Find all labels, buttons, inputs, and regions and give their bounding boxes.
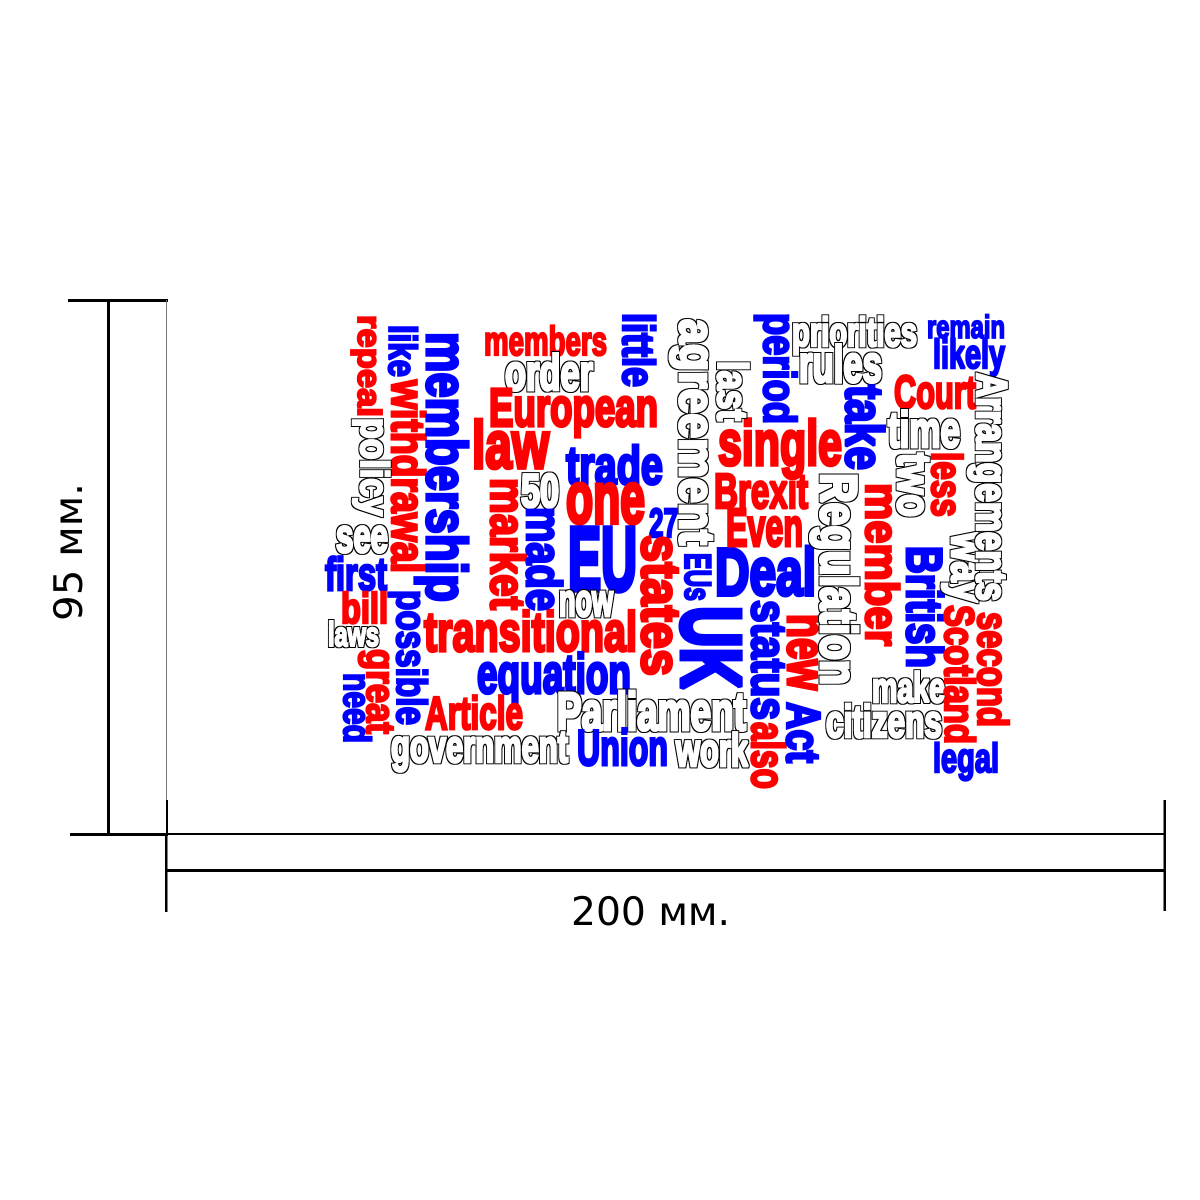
word: priorities: priorities [792,309,917,355]
word: remain: remain [927,309,1005,345]
word: withdrawal: withdrawal [382,379,434,573]
height dimension bracket [68,299,168,836]
word: little: little [613,313,662,387]
word: order: order [505,344,593,401]
word: members: members [484,318,607,364]
word: UK: UK [664,606,758,689]
width dimension bracket [165,800,1166,912]
word: first: first [325,548,387,600]
word: equation: equation [477,642,631,705]
word: repeal: repeal [350,315,387,417]
word: agreement: agreement [669,319,724,545]
word: see: see [336,509,388,562]
word: laws: laws [328,616,379,654]
word: market: market [480,478,534,610]
word: way: way [941,532,994,603]
word: time: time [888,401,960,458]
word: Scotland: Scotland [936,605,983,744]
word: likely: likely [933,331,1005,377]
word: like: like [380,325,423,377]
word: need: need [335,673,377,743]
word: British: British [896,546,952,668]
word: government: government [391,721,568,772]
word: Union: Union [577,719,668,776]
word: make: make [872,664,945,711]
word: European: European [489,378,658,438]
word: period: period [754,313,805,424]
word: Arrangements: Arrangements [967,373,1015,601]
word: policy: policy [352,418,395,516]
word: now: now [559,575,614,626]
word: great: great [358,649,402,734]
word: possible: possible [388,590,435,725]
word: Brexit: Brexit [714,464,808,519]
word: transitional: transitional [424,601,637,663]
word: second: second [968,612,1016,727]
word: legal: legal [933,735,999,781]
word: Even: Even [726,499,803,558]
word: take: take [834,385,893,470]
word: Regulation: Regulation [810,473,867,685]
word: citizens: citizens [826,696,942,747]
label: width 200 mm: 200 мм. [571,890,730,935]
word cloud [325,309,1016,789]
word: 27: 27 [649,500,678,546]
word: EU: EU [568,510,637,610]
word: law: law [472,408,549,483]
word: trade: trade [566,437,663,496]
word: member: member [856,483,908,646]
word: bill: bill [341,585,388,633]
word: work: work [675,724,748,776]
word: states: states [630,535,691,676]
word: Article: Article [425,687,523,739]
word: new: new [776,614,836,691]
word: single: single [718,409,842,479]
word: Act: Act [777,702,830,763]
word: 50: 50 [521,464,559,517]
word: membership: membership [414,332,477,602]
label: height 95 mm: 95 мм. [47,483,92,621]
word: Parliament: Parliament [557,683,746,742]
word: less: less [922,452,970,517]
word: one: one [566,459,645,539]
word: EUs: EUs [677,553,718,601]
word: Deal: Deal [715,535,816,610]
word: last: last [709,361,756,421]
word: Court: Court [894,366,976,418]
word: rules: rules [799,335,882,393]
word: also: also [742,722,794,789]
word: status: status [741,600,796,720]
word: two: two [888,453,940,517]
word: made: made [516,507,571,611]
